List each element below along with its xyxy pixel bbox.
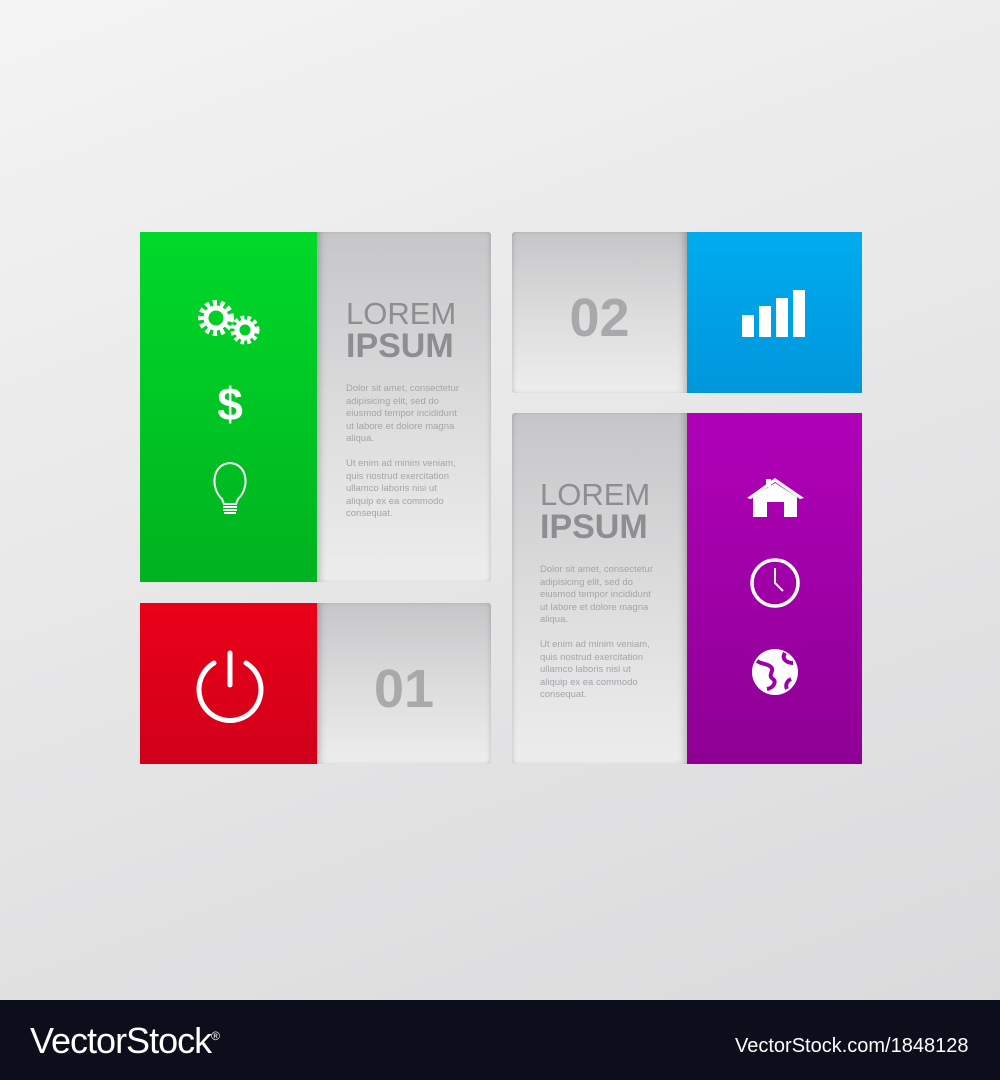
panel: green icons	[140, 232, 317, 582]
heading	[346, 296, 456, 365]
icon: bulb	[214, 463, 246, 513]
text block: Dolor sit amet, consectetur	[540, 564, 653, 575]
text block: quis nostrud exercitation	[346, 470, 449, 482]
text block: ut labore et dolore magna	[540, 602, 648, 612]
panel: lorem text 2	[512, 413, 687, 764]
heading: LOREM	[540, 477, 650, 512]
icon: house	[747, 478, 804, 517]
text block: eiusmod tempor incididunt	[346, 408, 457, 419]
panel: red power	[140, 603, 317, 764]
heading	[540, 477, 650, 546]
text block: ut labore et dolore magna	[346, 420, 454, 432]
panel: number 01	[317, 603, 491, 764]
heading: IPSUM	[540, 508, 648, 546]
text block: eiusmod tempor incididunt	[540, 589, 651, 600]
icon: clock	[752, 560, 798, 606]
panel: number 02	[512, 232, 687, 393]
text block: aliqua.	[540, 614, 568, 625]
text block: adipisicing elit, sed do	[346, 396, 439, 406]
text block: Ut enim ad minim veniam,	[540, 639, 650, 650]
panel: lorem text 1	[317, 232, 491, 582]
icon: dollar: $	[217, 378, 243, 430]
text block: adipisicing elit, sed do	[540, 576, 633, 588]
heading: LOREM	[346, 296, 456, 331]
text block	[346, 383, 459, 519]
text block: aliquip ex ea commodo	[346, 496, 444, 506]
footer id: VectorStock.com/1848128	[735, 1035, 968, 1057]
panel: purple icons	[687, 413, 862, 764]
text block: Ut enim ad minim veniam,	[346, 458, 456, 469]
icon: globe	[752, 649, 798, 695]
text block: Dolor sit amet, consectetur	[346, 383, 459, 394]
text block: consequat.	[346, 508, 392, 519]
text block	[540, 564, 653, 700]
text block: consequat.	[540, 689, 586, 700]
footer bar	[0, 1000, 1000, 1080]
footer logo: VectorStock®	[30, 1020, 219, 1061]
text block: quis nostrud exercitation	[540, 652, 643, 662]
panel: number 01: 01	[374, 659, 434, 719]
text block: ullamco laboris nisi ut	[540, 664, 631, 675]
heading: IPSUM	[346, 327, 454, 365]
text block: aliquip ex ea commodo	[540, 676, 638, 688]
icon: gears	[201, 303, 257, 342]
text block: aliqua.	[346, 433, 374, 444]
text block: ullamco laboris nisi ut	[346, 483, 437, 494]
icon: bar chart	[742, 290, 805, 337]
panel: blue chart	[687, 232, 862, 393]
panel: number 02: 02	[569, 288, 630, 348]
